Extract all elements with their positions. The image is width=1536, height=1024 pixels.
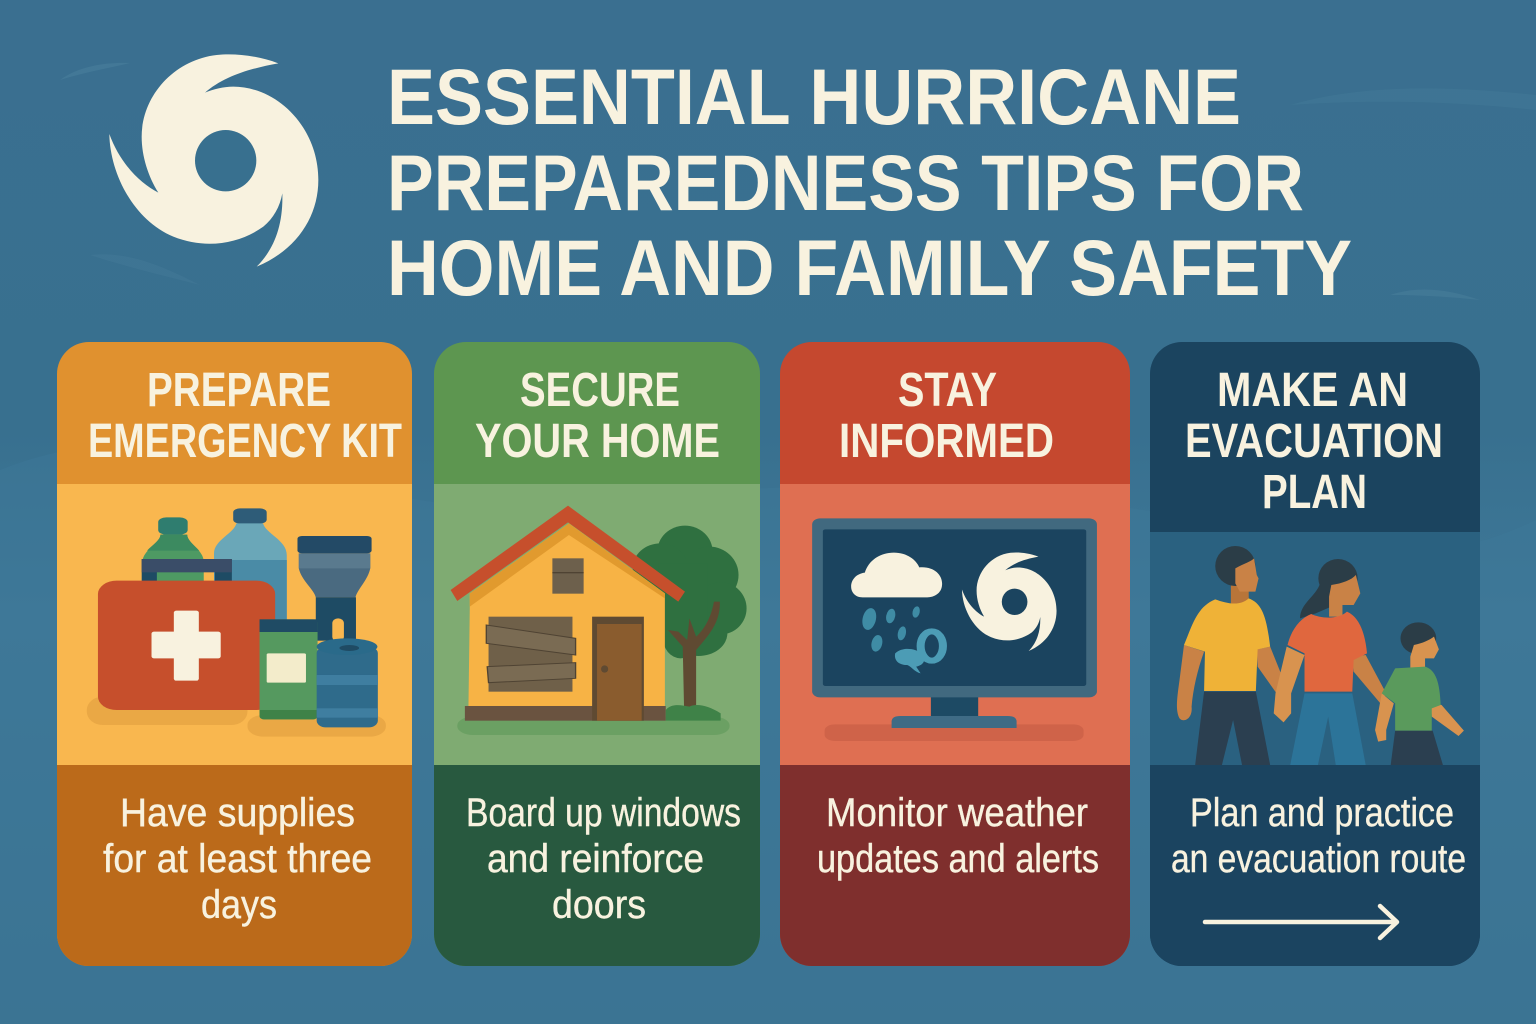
- body text: board windows: and reinforce: [487, 837, 704, 881]
- body text: monitor weather: [817, 791, 1099, 881]
- body text: monitor weather: Monitor weather: [826, 791, 1088, 835]
- title: HOME AND FAMILY SAFETY: [387, 223, 1352, 312]
- panel: make an evacuation plan: [1150, 342, 1480, 966]
- heading: make an evacuation plan: EVACUATION: [1185, 415, 1443, 468]
- icon: family walking: [1177, 546, 1464, 765]
- panel: stay informed: [780, 342, 1130, 966]
- heading: make an evacuation plan: [1185, 364, 1443, 519]
- title: PREPAREDNESS TIPS FOR: [387, 138, 1304, 227]
- body text: supplies: for at least three: [103, 837, 372, 881]
- panel: secure your home: [434, 342, 760, 966]
- heading: secure your home: SECURE: [520, 364, 680, 417]
- heading: secure your home: [475, 364, 720, 468]
- heading: prepare emergency kit: EMERGENCY KIT: [88, 415, 402, 468]
- icon: emergency supplies: [87, 508, 386, 737]
- body text: supplies: days: [201, 883, 277, 927]
- panel: prepare emergency kit: [57, 342, 412, 966]
- heading: prepare emergency kit: [88, 364, 402, 468]
- arrow: [1205, 906, 1397, 938]
- title: ESSENTIAL HURRICANE: [387, 52, 1241, 141]
- heading: secure your home: YOUR HOME: [475, 415, 720, 468]
- heading: stay informed: STAY: [898, 364, 997, 417]
- man: [1177, 546, 1289, 765]
- body text: plan route: Plan and practice: [1190, 791, 1454, 835]
- body text: board windows: [466, 791, 741, 927]
- heading: prepare emergency kit: PREPARE: [147, 364, 331, 417]
- heading: stay informed: [839, 364, 1054, 468]
- body text: supplies: Have supplies: [120, 791, 355, 835]
- woman: [1274, 559, 1386, 765]
- heading: make an evacuation plan: PLAN: [1262, 466, 1367, 519]
- child: [1375, 622, 1464, 765]
- icon: hurricane symbol: [109, 54, 318, 267]
- body text: plan route: [1171, 791, 1466, 881]
- heading: stay informed: INFORMED: [839, 415, 1054, 468]
- icon: boarded house and tree: [451, 506, 747, 735]
- body text: board windows: Board up windows: [466, 791, 741, 835]
- heading: make an evacuation plan: MAKE AN: [1217, 364, 1408, 417]
- body text: supplies: [103, 791, 372, 927]
- title: [387, 52, 1352, 312]
- icon: weather monitor: [812, 518, 1097, 741]
- body text: board windows: doors: [552, 883, 646, 927]
- body text: monitor weather: updates and alerts: [817, 837, 1099, 881]
- body text: plan route: an evacuation route: [1171, 837, 1466, 881]
